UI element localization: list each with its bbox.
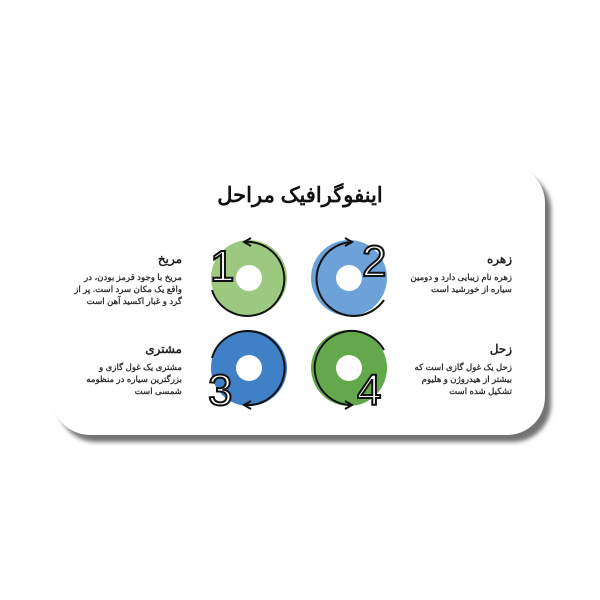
text: mars <box>74 252 182 306</box>
text: mars: مریخ <box>158 252 182 266</box>
text: saturn: زحل یک غول گازی است که بیشتر از هیدروژن و هلیوم تشکیل شده است <box>415 362 512 396</box>
circle 2 <box>311 237 387 316</box>
panel: card <box>52 165 545 435</box>
circle 1: 1 <box>210 242 234 291</box>
text: venus <box>410 252 512 294</box>
text: jupiter: مشتری <box>145 342 182 356</box>
circle 1 <box>210 238 287 316</box>
text: jupiter: مشتری یک غول گازی و بزرگترین سیاره در منظومه شمسی است <box>86 362 182 396</box>
circle 4 <box>311 330 387 415</box>
circle 3: 3 <box>208 366 232 415</box>
title: اینفوگرافیک مراحل <box>217 184 383 207</box>
circle 2: 2 <box>362 237 386 286</box>
text: jupiter <box>86 342 182 396</box>
circle 3 <box>208 330 287 415</box>
text: mars: مریخ با وجود قرمز بودن، در واقع یک مکان سرد است. پر از گرد و غبار اکسید آهن است <box>74 272 182 306</box>
text: venus: زهره نام زیبایی دارد و دومین سیاره از خورشید است <box>410 272 512 294</box>
circle 4: 4 <box>357 366 381 415</box>
text: venus: زهره <box>487 252 512 266</box>
text: saturn <box>414 342 512 396</box>
text: saturn: زحل <box>490 342 512 356</box>
